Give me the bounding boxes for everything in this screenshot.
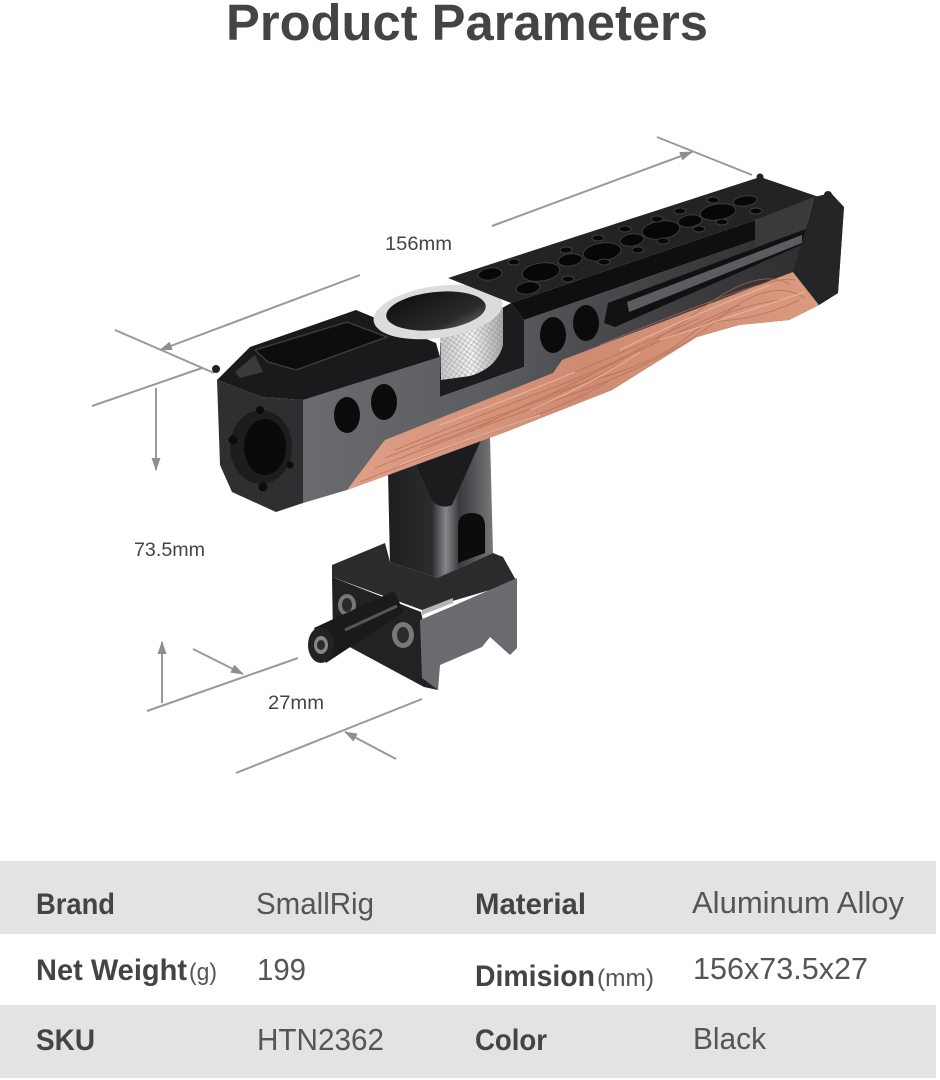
table row 2: (g) xyxy=(189,959,217,986)
product: notch wall behind knob xyxy=(440,303,524,397)
product: top plate with threaded holes xyxy=(448,177,819,320)
dimension lines: width 27mm xyxy=(193,649,422,773)
table row 2: Dimision xyxy=(475,960,595,993)
product: knurled silver knob xyxy=(370,277,506,380)
table row 3: Color xyxy=(475,1024,547,1057)
table row 1: Material xyxy=(475,888,586,921)
dimension lines: length 156mm xyxy=(115,137,752,373)
dimension label: 73.5mm: 73.5mm xyxy=(134,540,205,561)
product: handle side face xyxy=(303,207,844,503)
table row 3: HTN2362 xyxy=(257,1022,384,1057)
dimension label: 156mm: 156mm xyxy=(385,234,452,255)
product: thumb screw xyxy=(308,591,404,663)
product: left block top with shoe recess xyxy=(217,310,440,400)
table row 2: 199 xyxy=(257,952,306,987)
table row 3: Black xyxy=(693,1021,766,1056)
product: front end face xyxy=(212,365,303,512)
table row 1: Aluminum Alloy xyxy=(692,885,904,920)
product: mount pillar xyxy=(388,436,493,578)
table row 2: Net Weight xyxy=(36,954,187,987)
table row 2 xyxy=(36,951,868,993)
table row 2: 156x73.5x27 xyxy=(693,951,868,986)
dimension lines: height 73.5mm xyxy=(92,368,298,711)
dimension label: 27mm: 27mm xyxy=(268,693,324,714)
table row 1: SmallRig xyxy=(256,886,374,921)
product: side slot xyxy=(604,229,808,327)
product: rail clamp base xyxy=(332,543,517,690)
specification table xyxy=(0,861,936,1078)
product: right end cap xyxy=(755,174,844,305)
table row 3 xyxy=(0,1005,936,1078)
table row 1 xyxy=(0,861,936,934)
table row 3: SKU xyxy=(36,1024,95,1057)
table row 1: Brand xyxy=(36,888,115,921)
product: side mounting holes xyxy=(334,305,599,433)
table row 2: (mm) xyxy=(597,965,654,992)
product: walnut wood grip xyxy=(347,272,819,490)
